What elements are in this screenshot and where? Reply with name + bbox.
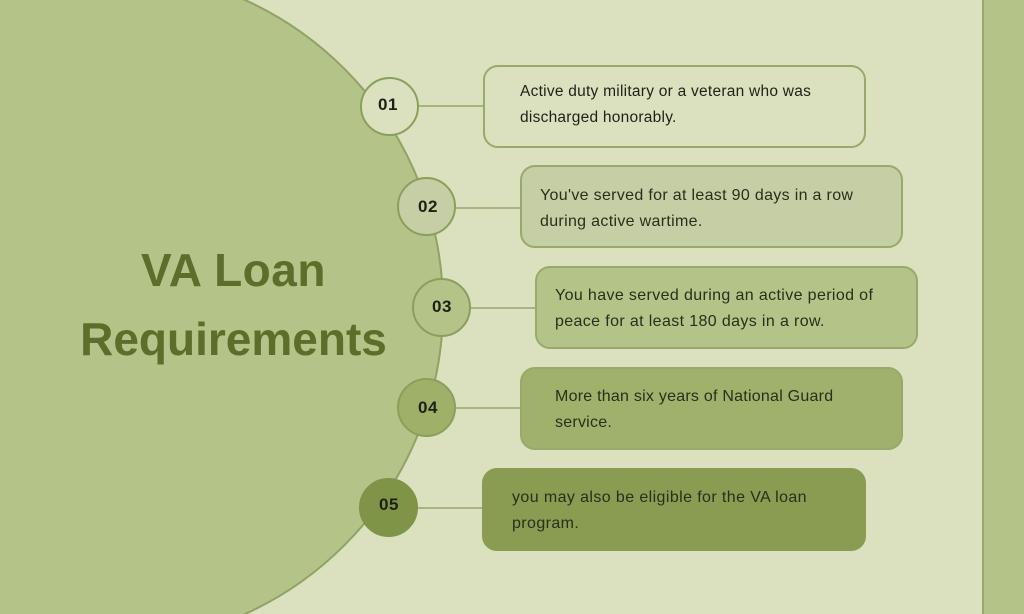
connector 03: [471, 307, 536, 309]
right side band: [982, 0, 1024, 614]
number 04: 04: [418, 398, 438, 417]
box 03: [535, 266, 918, 349]
number 01: [360, 77, 419, 136]
box 05: [482, 468, 866, 551]
box 04: service.: [555, 414, 612, 431]
box 04: More than six years of National Guard: [555, 388, 833, 405]
number 02: [397, 177, 456, 236]
number 04: [397, 378, 456, 437]
number 05: 05: [379, 495, 399, 514]
box 05: program.: [512, 515, 579, 532]
title: VA Loan: [141, 244, 326, 296]
box 04: [520, 367, 903, 450]
box 01: [483, 65, 866, 148]
box 01: discharged honorably.: [520, 109, 677, 126]
connector 04: [456, 407, 521, 409]
box 02: You've served for at least 90 days in a row: [540, 187, 853, 204]
number 05: [359, 478, 418, 537]
box 01: Active duty military or a veteran who was: [520, 83, 811, 100]
title: [80, 244, 387, 365]
box 02: during active wartime.: [540, 213, 703, 230]
connector 02: [456, 207, 521, 209]
number 02: 02: [418, 197, 438, 216]
connector 05: [418, 507, 483, 509]
box 05: you may also be eligible for the VA loan: [512, 489, 807, 506]
box 02: [520, 165, 903, 248]
box 03: You have served during an active period of: [555, 287, 873, 304]
number 01: 01: [378, 95, 398, 114]
title: Requirements: [80, 313, 387, 365]
connector 01: [418, 105, 484, 107]
number 03: [412, 278, 471, 337]
number 03: 03: [432, 297, 452, 316]
box 03: peace for at least 180 days in a row.: [555, 313, 825, 330]
